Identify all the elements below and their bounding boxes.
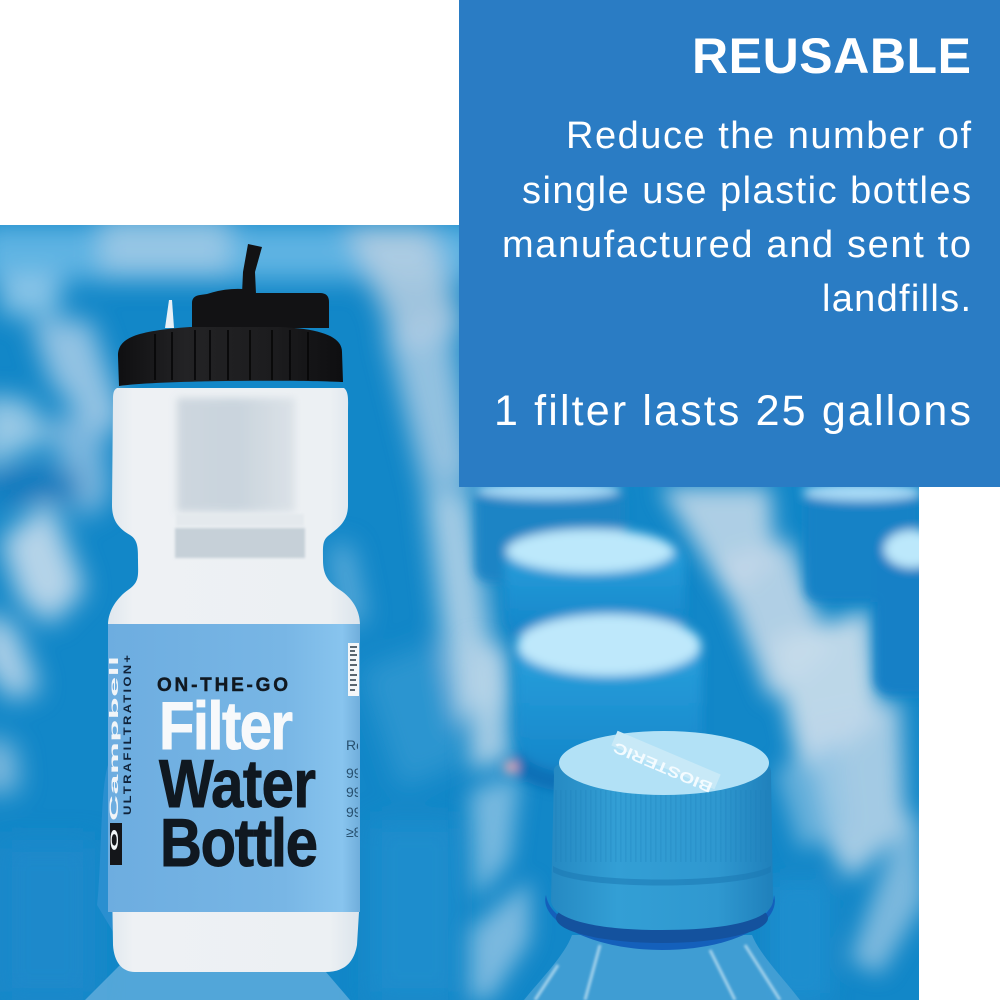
body text: Reduce the number of xyxy=(566,115,971,157)
neck ring xyxy=(545,895,775,950)
cap top xyxy=(559,731,769,795)
product: filter water bottle xyxy=(85,244,364,1000)
cap top printed band xyxy=(608,731,721,797)
body text: landfills. xyxy=(822,278,971,320)
body text xyxy=(502,115,971,320)
brand block xyxy=(110,823,122,865)
QR sticker xyxy=(348,643,359,696)
bottle loop behind body xyxy=(97,765,115,935)
label title: Filter xyxy=(159,689,293,764)
body text: single use plastic bottles xyxy=(522,170,971,212)
brand logo mark: O xyxy=(108,829,121,851)
cap rim xyxy=(118,327,343,386)
photo: rows of blue plastic bottles xyxy=(0,215,940,1000)
label title xyxy=(159,689,318,881)
brand name: Campbell xyxy=(107,656,121,821)
label eyebrow: ON-THE-GO xyxy=(157,675,288,696)
clipped label specs: Re xyxy=(346,737,364,753)
bottle cap xyxy=(118,244,343,386)
cap upper xyxy=(192,289,329,328)
clipped label specs: ≥8 xyxy=(346,824,362,840)
cap top printed band: BIOSTERIC xyxy=(611,738,715,795)
bottle body xyxy=(108,388,360,972)
blurred background bottles on the left xyxy=(0,215,500,1000)
inner filter cartridge xyxy=(175,398,305,558)
clipped label specs: 99 xyxy=(346,784,362,800)
spout xyxy=(242,244,262,294)
foreground blue bottle cap xyxy=(551,731,773,930)
clipped label specs: 99 xyxy=(346,804,362,820)
bottle label xyxy=(107,624,364,912)
brand descriptor: ULTRAFILTRATION+ xyxy=(121,655,134,815)
heading: reusable: REUSABLE xyxy=(692,28,971,84)
label title: Bottle xyxy=(160,806,318,881)
callout: filter life: 1 filter lasts 25 gallons xyxy=(494,387,971,435)
label title: Water xyxy=(159,747,316,822)
body text: manufactured and sent to xyxy=(502,224,971,266)
panel: reusable message xyxy=(459,0,1000,487)
clipped label specs: 99 xyxy=(346,765,362,781)
foreground PET bottle neck xyxy=(524,893,800,1000)
spare bottle neck behind product xyxy=(85,965,350,1000)
blurred background bottles on the right xyxy=(470,487,925,1000)
clipped label specs xyxy=(346,740,358,837)
rear bottle caps, out of focus xyxy=(475,481,940,793)
white tab xyxy=(165,300,174,328)
